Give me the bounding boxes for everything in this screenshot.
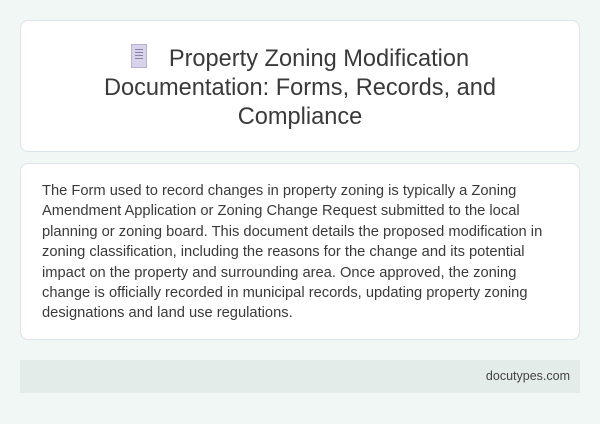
footer bar — [20, 360, 580, 393]
title card — [20, 20, 580, 152]
title: Property Zoning Modification Documentation: Forms, Records, and Compliance — [104, 46, 496, 130]
body text card — [20, 163, 580, 340]
footer text: docutypes.com — [486, 369, 570, 383]
icon: document — [131, 44, 147, 68]
description text: The Form used to record changes in property zoning is typically a Zoning Amendment Application or Zoning Change Request submitted to the local planning or zoning board. This document details the proposed modification in zoning classification, including the reasons for the change and its potential impact on the property and surrounding area. Once approved, the zoning change is officially recorded in municipal records, updating property zoning designations and land use regulations. — [42, 183, 542, 321]
